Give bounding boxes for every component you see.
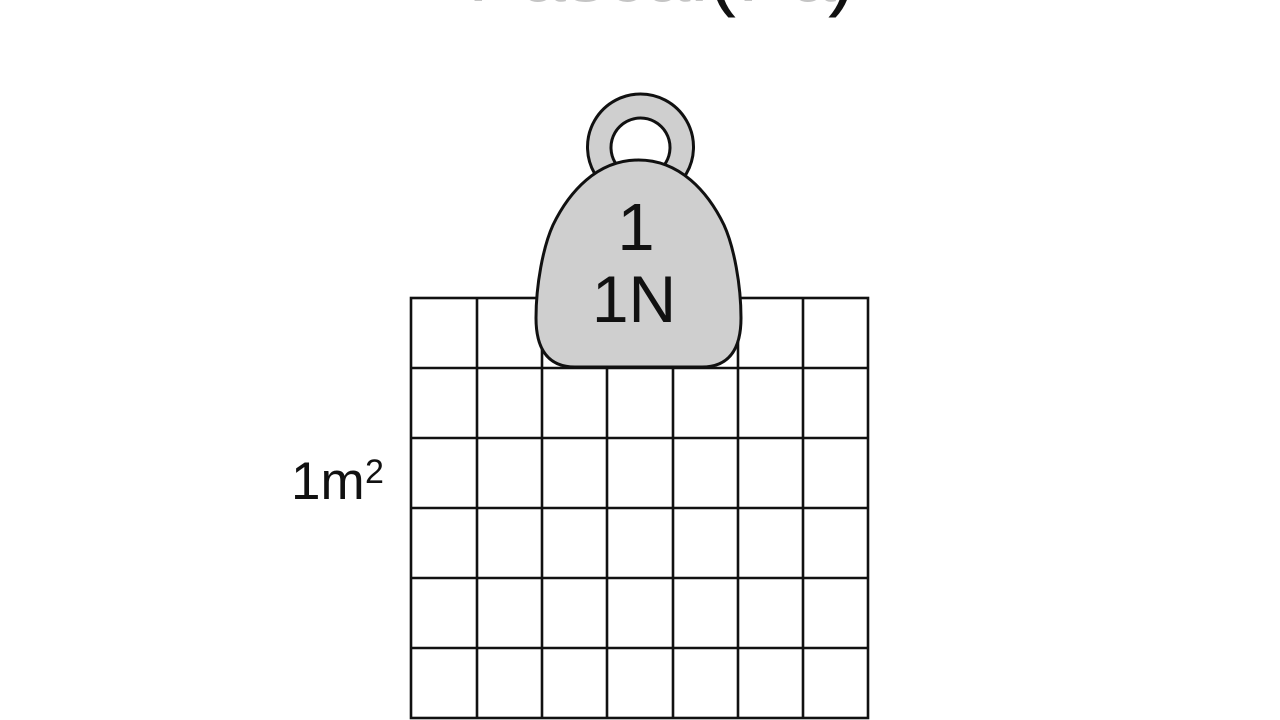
icon: weight [536,94,741,367]
title (clipped at top edge) [468,0,856,18]
diagram: one newton weight on a one square metre grid [295,0,870,720]
grid: one square metre [411,298,868,718]
label: area 1 square metre: 1m [291,452,365,511]
weight body [536,160,741,367]
weight number: 1 [617,190,655,265]
weight ring [588,94,694,200]
label: area 1 square metre: 2 [365,453,384,491]
weight force label: 1N [592,262,676,336]
